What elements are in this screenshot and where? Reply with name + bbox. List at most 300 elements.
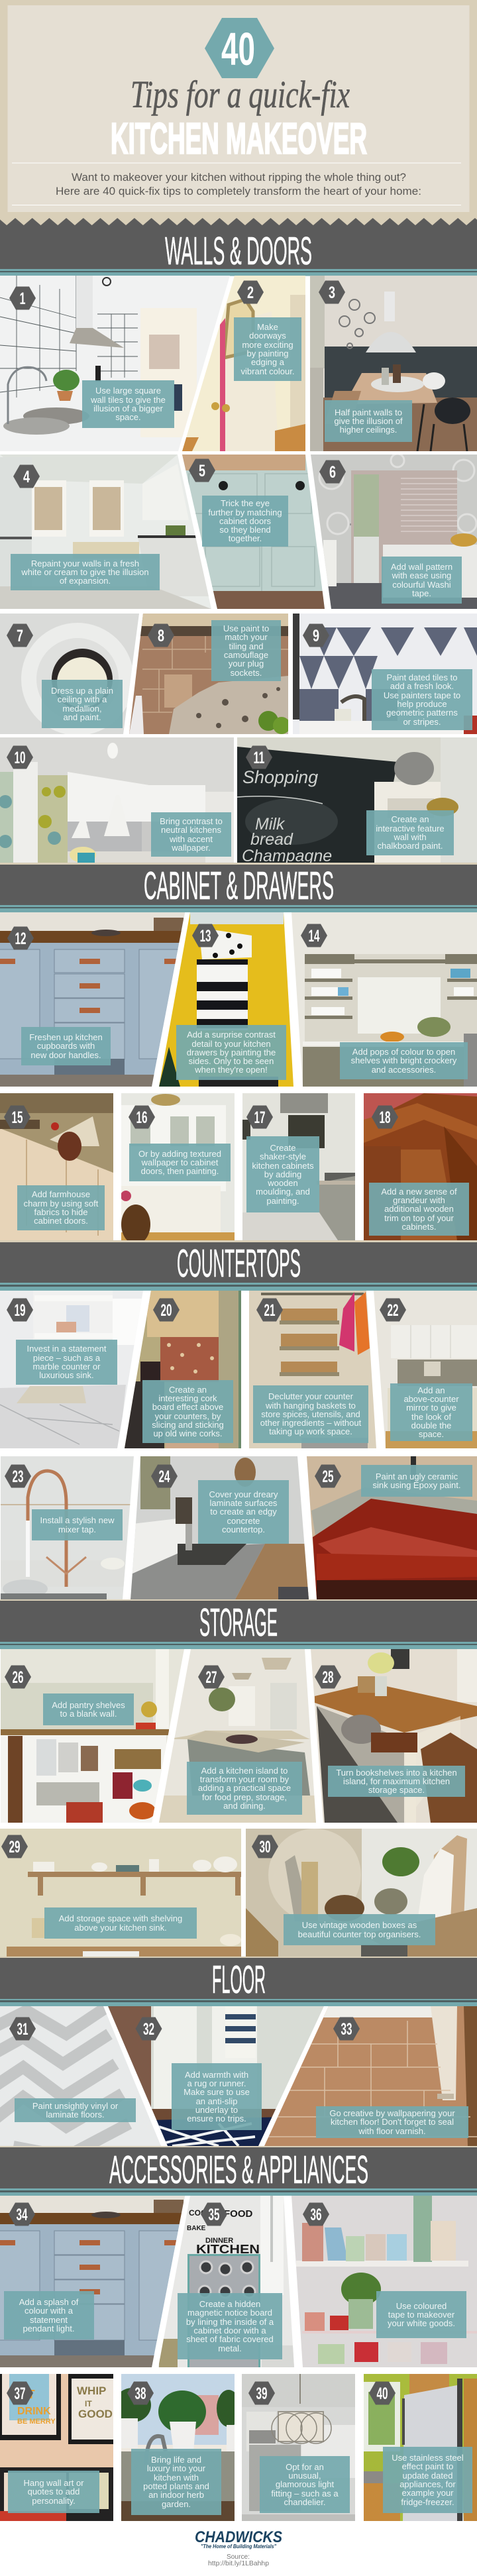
caption: tip 5 (202, 496, 288, 547)
caption: tip 20: Create an (169, 1385, 207, 1395)
number badge 20 (153, 1299, 180, 1321)
caption: tip 18 (369, 1183, 469, 1236)
panel: tip 20 (125, 1291, 241, 1448)
caption: tip 4: Repaint your walls in a fresh (31, 559, 139, 568)
caption: tip 9: help produce (397, 699, 447, 709)
caption: tip 40: example your (401, 2488, 454, 2498)
number badge 31: 31 (17, 2020, 28, 2039)
number badge 7: 7 (17, 627, 23, 645)
number badge 25: 25 (322, 1468, 334, 1486)
caption: tip 8: match your (225, 632, 268, 642)
caption: tip 24: laminate surfaces (210, 1498, 277, 1508)
caption: tip 5: further by matching (208, 508, 282, 517)
caption: tip 35: magnetic notice board (187, 2308, 272, 2318)
caption: tip 18: Add a new sense of (381, 1187, 457, 1197)
caption: tip 5: cabinet doors (219, 516, 271, 526)
panel: tip 36 (292, 2196, 477, 2367)
caption: tip 24: concrete (227, 1516, 260, 1526)
logo: Chadwicks: "The Home of Building Materials" (201, 2543, 277, 2549)
caption: tip 33: kitchen floor! Don't forget to seal (331, 2117, 454, 2127)
photo: kitchen island (159, 1649, 316, 1823)
number badge 30: 30 (260, 1838, 270, 1856)
panel: tip 8 (129, 614, 290, 734)
caption: tip 21: Declutter your counter (268, 1391, 353, 1401)
caption: tip 28: storage space. (368, 1785, 425, 1795)
photo: magnetic notice board: FOOD (224, 2208, 252, 2220)
panel: tip 30 (246, 1829, 477, 1957)
caption: tip 40: fridge-freezer. (401, 2497, 454, 2507)
caption: tip 7: Dress up a plain (51, 686, 113, 696)
number badge 8 (148, 624, 174, 647)
caption: tip 39: glamorous light (276, 2479, 334, 2489)
caption: tip 36: tape to makeover (388, 2310, 454, 2320)
caption: tip 3 (325, 400, 412, 442)
caption: tip 15: cabinet doors. (34, 1216, 88, 1226)
caption: tip 21: other ingredients – without (260, 1418, 361, 1428)
caption: tip 31: laminate floors. (46, 2110, 105, 2120)
number badge 40 (369, 2381, 396, 2405)
caption: tip 6: colourful Washi (392, 579, 451, 590)
caption: tip 21: store spices, utensils, and (261, 1409, 360, 1419)
intro text: Here are 40 quick-fix tips to completely transform the heart of your home: (56, 185, 421, 197)
panel: tip 35 (158, 2196, 294, 2367)
caption: tip 17: wooden (268, 1178, 298, 1188)
number badge 15 (4, 1105, 30, 1129)
panel: tip 17 (242, 1093, 355, 1240)
number badge 18: 18 (379, 1108, 391, 1127)
photo: yellow cabinet striped drawers (159, 912, 293, 1087)
caption: tip 17: by adding (264, 1169, 301, 1179)
header inner panel (8, 5, 469, 212)
caption: tip 40 (383, 2447, 472, 2513)
caption: tip 22: above-counter (403, 1394, 459, 1404)
number badge 17: 17 (254, 1108, 265, 1127)
number badge 18 (372, 1105, 398, 1129)
caption: tip 17: Create (270, 1143, 295, 1153)
caption: tip 17: moulding, and (256, 1187, 310, 1197)
photo: blue cabinets with copper handles (0, 912, 186, 1087)
photo: chalkboard wall (237, 737, 477, 865)
number badge 14 (301, 924, 327, 947)
number badge 22 (380, 1299, 406, 1321)
photo: framed wall art: GOOD (78, 2408, 113, 2420)
panel: tip 10 (0, 737, 234, 863)
caption: tip 15: charm by using soft (24, 1199, 98, 1208)
photo: magnetic notice board: BAKE (187, 2225, 206, 2232)
caption: tip 24 (198, 1480, 289, 1544)
photo: wooden shelf over sink (0, 1829, 241, 1957)
caption: tip 6: with ease using (392, 570, 451, 580)
photo: framed wall art: AT (20, 2388, 35, 2401)
caption: tip 28 (328, 1766, 465, 1797)
caption: tip 38: Bring life and (151, 2455, 201, 2465)
icon: hexagon with number 40: 40 (221, 23, 255, 75)
number badge 24: 24 (159, 1468, 170, 1486)
photo: vintage wooden boxes (246, 1829, 477, 1957)
number badge 39: 39 (256, 2385, 268, 2403)
caption: tip 40: effect paint to (402, 2461, 453, 2471)
photo: pantry shelves (1, 1649, 184, 1823)
caption: tip 22: space. (419, 1429, 444, 1439)
caption: tip 25: Paint an ugly ceramic (376, 1472, 458, 1481)
panel: tip 27 (159, 1649, 316, 1823)
panel: tip 22 (374, 1291, 477, 1448)
caption: tip 33: Go creative by wallpapering your (329, 2108, 455, 2118)
caption: tip 5: together. (229, 533, 262, 543)
caption: tip 10: Bring contrast to (160, 816, 223, 826)
number badge 3 (319, 281, 345, 303)
caption: tip 20 (142, 1380, 233, 1443)
number badge 19 (7, 1299, 33, 1321)
caption: tip 6: tape. (412, 588, 431, 598)
caption: tip 14: and accessories. (372, 1065, 436, 1075)
caption: tip 12: new door handles. (30, 1050, 101, 1060)
caption: tip 27: and dining. (223, 1801, 266, 1811)
caption: tip 17: painting. (266, 1196, 299, 1206)
caption: tip 20: up old wine corks. (153, 1428, 223, 1438)
number badge 33 (333, 2017, 360, 2041)
caption: tip 11 (366, 810, 454, 855)
caption: tip 37: personality. (32, 2496, 76, 2506)
icon: hexagon with number 40 (205, 18, 274, 78)
caption: tip 29: Add storage space with shelving (59, 1913, 182, 1923)
caption: tip 8 (211, 620, 281, 681)
section banner: walls and doors (0, 218, 477, 276)
caption: tip 10: with accent (170, 833, 213, 844)
caption: tip 28: Turn bookshelves into a kitchen (336, 1768, 457, 1778)
caption: tip 4: of expansion. (60, 576, 111, 586)
caption: tip 27: adding a practical space (198, 1783, 291, 1793)
photo: ceiling medallion (0, 614, 139, 735)
number badge 9: 9 (313, 627, 319, 645)
caption: tip 19: piece – such as a (33, 1353, 100, 1363)
number badge 23 (5, 1464, 31, 1488)
caption: tip 13: drawers by painting the (187, 1047, 276, 1057)
caption: tip 30 (284, 1914, 435, 1945)
number badge 33: 33 (341, 2020, 352, 2039)
caption: tip 37: quotes to add (28, 2487, 80, 2496)
caption: tip 8: your plug (229, 659, 264, 669)
panel: tip 14 (292, 912, 477, 1087)
source (208, 2553, 269, 2567)
photo: chandelier light (242, 2374, 355, 2521)
caption: tip 19: Invest in a statement (27, 1344, 106, 1354)
caption: tip 1: illusion of a bigger (93, 403, 163, 413)
photo: painted door edging (182, 276, 305, 451)
number badge 1 (9, 286, 36, 310)
panel: tip 13 (159, 912, 293, 1087)
caption: tip 27: Add a kitchen island to (201, 1766, 288, 1776)
number badge 4 (13, 465, 40, 488)
caption: tip 35 (178, 2293, 282, 2359)
caption: tip 10: wallpaper. (172, 843, 211, 853)
section banner: countertops (0, 1240, 477, 1291)
caption: tip 7: medallion, (62, 704, 102, 713)
caption: tip 26: to a blank wall. (60, 1709, 117, 1719)
number badge 28 (315, 1666, 341, 1688)
caption: tip 12: Freshen up kitchen (29, 1032, 103, 1042)
caption: tip 11: wall with (394, 832, 427, 842)
caption: tip 24: to create an edgy (210, 1507, 277, 1517)
caption: tip 40: update dated (403, 2471, 452, 2481)
caption: tip 38: kitchen with (154, 2473, 199, 2483)
panel: tip 24 (131, 1456, 309, 1599)
caption: tip 16: wallpaper to cabinet (142, 1157, 218, 1167)
caption: tip 16: doors, then painting. (141, 1166, 219, 1176)
number badge 9 (303, 624, 329, 647)
number badge 4: 4 (23, 468, 30, 486)
number badge 23: 23 (12, 1468, 24, 1486)
caption: tip 2 (234, 317, 301, 381)
number badge 31 (9, 2017, 36, 2041)
caption: tip 27: transform your room by (200, 1774, 289, 1784)
number badge 8: 8 (158, 627, 164, 645)
number badge 5 (189, 458, 215, 482)
panel: tip 37 (0, 2374, 113, 2521)
caption: tip 27 (187, 1762, 302, 1815)
caption: tip 39: chandelier. (284, 2497, 325, 2507)
panel: tip 23 (1, 1456, 134, 1599)
photo: white dresser with curtains (121, 1093, 235, 1244)
caption: tip 8: sockets. (231, 668, 262, 678)
caption: tip 34: pendant light. (23, 2324, 75, 2334)
caption: tip 4: white or cream to give the illusion (21, 567, 149, 577)
number badge 19: 19 (15, 1301, 25, 1320)
caption: tip 20: slicing and sticking (152, 1420, 224, 1430)
number badge 35: 35 (208, 2206, 220, 2224)
photo: open shelves with crockery (292, 912, 477, 1087)
caption: tip 20: board effect above (152, 1402, 223, 1412)
caption: tip 23 (32, 1509, 123, 1540)
caption: tip 17: kitchen cabinets (252, 1161, 314, 1171)
caption: tip 7: ceiling with a (58, 694, 107, 704)
photo: paisley wallpaper kitchen (311, 454, 477, 609)
number badge 27: 27 (205, 1668, 217, 1687)
caption: tip 38: an indoor herb (148, 2490, 204, 2500)
number badge 29 (1, 1835, 28, 1858)
number badge 35 (201, 2202, 227, 2226)
number badge 34: 34 (16, 2206, 28, 2224)
caption: tip 32: a rug or runner. (187, 2078, 246, 2088)
caption: tip 35: Create a hidden (199, 2299, 260, 2309)
caption: tip 7 (42, 680, 123, 728)
photo: chevron painted floor (0, 2006, 161, 2157)
caption: tip 30: beautiful counter top organisers. (298, 1929, 421, 1939)
photo: framed wall art: IT (85, 2399, 92, 2408)
caption: tip 15: Add farmhouse (32, 1189, 90, 1199)
caption: tip 12: cupboards with (37, 1041, 95, 1051)
caption: tip 19 (16, 1340, 117, 1385)
caption: tip 23: mixer tap. (58, 1524, 96, 1534)
caption: tip 2: by painting (247, 349, 288, 358)
number badge 21 (256, 1299, 283, 1321)
caption: tip 16 (129, 1144, 231, 1181)
caption: tip 8: Use paint to (223, 623, 269, 633)
caption: tip 13: detail to your kitchen (191, 1039, 271, 1049)
panel: tip 2 (182, 276, 305, 451)
number badge 29: 29 (9, 1838, 20, 1856)
caption: tip 36: your white goods. (388, 2318, 455, 2328)
caption: tip 3: give the illusion of (334, 416, 403, 426)
number badge 10: 10 (15, 749, 25, 767)
caption: tip 21 (253, 1385, 368, 1443)
number badge 38 (127, 2381, 154, 2405)
photo: hanging spice baskets (249, 1291, 376, 1448)
caption: tip 11: interactive feature (376, 824, 445, 833)
caption: tip 19: luxurious sink. (39, 1370, 94, 1380)
photo: bookshelf island (311, 1649, 477, 1823)
photo: grey shaker cabinets (242, 1093, 355, 1240)
caption: tip 8: camouflage (224, 650, 268, 660)
caption: tip 37: Hang wall art or (23, 2478, 84, 2488)
caption: tip 32: ensure no trips. (187, 2114, 246, 2123)
photo: warm stone floor (264, 2006, 477, 2147)
panel: tip 39 (242, 2374, 355, 2521)
caption: tip 15: fabrics to hide (34, 1207, 87, 1217)
photo: chalkboard wall: Shopping (242, 767, 318, 787)
panel: tip 19 (0, 1291, 143, 1448)
caption: tip 33 (316, 2106, 468, 2138)
photo: bright white kitchen (0, 455, 211, 609)
panel: tip 18 (364, 1093, 477, 1240)
photo: copper mixer tap (1, 1456, 134, 1599)
caption: tip 40: appliances, for (399, 2479, 456, 2489)
caption: tip 23: Install a stylish new (40, 1515, 114, 1525)
caption: tip 38: garden. (162, 2499, 191, 2509)
caption: tip 13: when they're open! (195, 1065, 268, 1075)
photo: wine cork splashback (125, 1291, 241, 1448)
caption: tip 9: Use painters tape to (384, 690, 460, 700)
caption: tip 3: Half paint walls to (335, 407, 402, 417)
caption: tip 39 (260, 2456, 350, 2513)
caption: tip 1: wall tiles to give the (91, 395, 166, 405)
photo: marble counter and sink (0, 1291, 143, 1448)
number badge 22: 22 (387, 1301, 399, 1320)
caption: tip 9: Paint dated tiles to (387, 672, 457, 682)
caption: tip 32 (172, 2063, 262, 2130)
caption: tip 9: or stripes. (403, 717, 441, 727)
caption: tip 9 (372, 669, 472, 730)
caption: tip 26: Add pantry shelves (52, 1700, 125, 1710)
number badge 28: 28 (322, 1668, 334, 1687)
photo: white tiled kitchen (0, 276, 230, 451)
caption: tip 1 (82, 380, 174, 428)
caption: tip 2: vibrant colour. (241, 366, 294, 376)
header outer frame (0, 0, 477, 229)
caption: tip 25 (361, 1465, 472, 1497)
panel: tip 28 (311, 1649, 477, 1823)
number badge 27 (198, 1666, 225, 1688)
caption: tip 14 (340, 1042, 468, 1079)
caption: tip 17 (246, 1136, 319, 1212)
photo: magnetic notice board: KITCHEN (196, 2243, 260, 2256)
number badge 17 (246, 1105, 273, 1129)
number badge 5: 5 (199, 462, 205, 480)
caption: tip 22: Add an (417, 1385, 445, 1395)
panel: tip 16 (121, 1093, 235, 1244)
caption: tip 8: tiling and (229, 641, 264, 651)
caption: tip 32: underlay to (195, 2105, 238, 2115)
caption: tip 18: additional wooden (384, 1204, 454, 1214)
caption: tip 22: mirror to give (406, 1403, 456, 1413)
number badge 13 (192, 924, 219, 947)
photo: farmhouse cabinets with rooster (0, 1093, 113, 1240)
panel: tip 32 (108, 2006, 324, 2146)
photo: red epoxy painted sink (307, 1456, 477, 1599)
section banner: floor: FLOOR (212, 1958, 266, 2002)
caption: tip 35: metal. (218, 2343, 242, 2353)
caption: tip 38: luxury into your (147, 2463, 205, 2473)
panel: tip 9 (293, 614, 477, 734)
number badge 2: 2 (247, 284, 254, 302)
caption: tip 2: more exciting (242, 340, 293, 350)
number badge 16 (129, 1105, 155, 1129)
number badge 32 (135, 2017, 162, 2041)
caption: tip 31 (15, 2098, 136, 2122)
caption: tip 15 (17, 1185, 105, 1230)
number badge 25 (315, 1464, 341, 1488)
caption: tip 9: geometric patterns (386, 708, 458, 718)
caption: tip 16: Or by adding textured (138, 1149, 221, 1159)
caption: tip 39: fitting – such as a (271, 2489, 339, 2498)
caption: tip 11: Create an (391, 814, 429, 824)
caption: tip 25: sink using Epoxy paint. (373, 1480, 460, 1490)
caption: tip 17: shaker-style (260, 1152, 306, 1161)
photo: potted herbs on sill (114, 2374, 240, 2521)
caption: tip 20: your counters, by (155, 1411, 221, 1421)
panel: tip 7 (0, 614, 139, 735)
number badge 12: 12 (15, 930, 26, 948)
caption: tip 6: Add wall pattern (391, 562, 452, 572)
photo: above-counter mirror (374, 1291, 477, 1448)
number badge 1: 1 (20, 290, 26, 308)
panel: tip 1 (0, 276, 230, 451)
number badge 7 (7, 624, 33, 647)
caption: tip 36: Use coloured (396, 2301, 447, 2311)
caption: tip 35: sheet of fabric covered (186, 2334, 274, 2344)
photo: framed wall art: WHIP (77, 2385, 106, 2397)
section banner: countertops: COUNTERTOPS (177, 1242, 301, 1285)
caption: tip 34: statement (30, 2315, 68, 2324)
number badge 37 (7, 2381, 33, 2405)
photo: framed wall art (0, 2374, 113, 2521)
caption: tip 27: for food prep, storage, (202, 1792, 287, 1802)
caption: tip 9: add a fresh look. (390, 681, 454, 691)
number badge 11: 11 (253, 749, 265, 767)
caption: tip 2: Make (257, 322, 278, 332)
panel: tip 4 (0, 455, 211, 609)
caption: tip 38 (131, 2449, 221, 2515)
panel: tip 3 (310, 276, 477, 451)
panel: tip 31 (0, 2006, 161, 2157)
panel: tip 15 (0, 1093, 113, 1240)
photo: chalkboard wall: bread (250, 830, 293, 849)
number badge 6: 6 (329, 463, 336, 482)
caption: tip 11: chalkboard paint. (377, 841, 443, 851)
caption: tip 6 (382, 557, 462, 604)
caption: tip 18: cabinets. (401, 1222, 437, 1232)
intro text (56, 171, 421, 197)
caption: tip 7: and paint. (63, 712, 101, 722)
panel: tip 26 (1, 1649, 184, 1823)
caption: tip 39: Opt for an (286, 2462, 324, 2472)
caption: tip 24: Cover your dreary (209, 1489, 278, 1499)
source: http://bit.ly/1LBahhp (208, 2559, 269, 2567)
panel: tip 11 (237, 737, 477, 865)
caption: tip 29 (44, 1907, 197, 1939)
caption: tip 34 (4, 2291, 94, 2339)
panel: tip 12 (0, 912, 186, 1087)
